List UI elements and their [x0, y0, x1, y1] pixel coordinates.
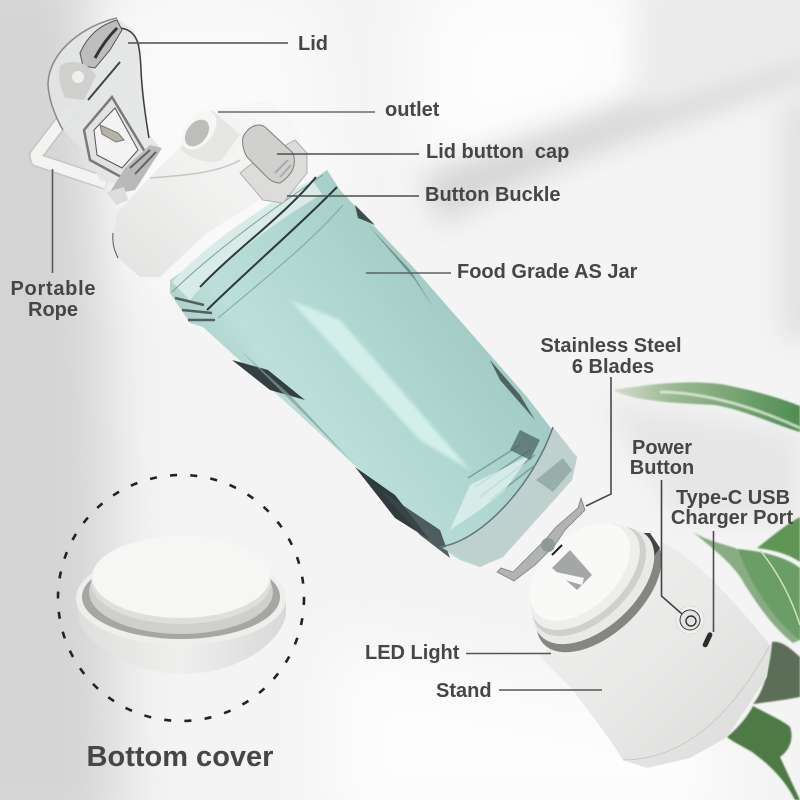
dark rim	[515, 509, 683, 675]
label: portable rope	[10, 169, 96, 321]
label: power button: Power	[632, 437, 692, 459]
inside rim	[172, 180, 322, 300]
base unit	[511, 504, 770, 768]
label: led light: LED Light	[365, 642, 460, 664]
label: power button	[630, 437, 694, 614]
stand	[540, 543, 770, 768]
label: type-c port: Charger Port	[671, 507, 793, 529]
bottom cover dashed circle	[58, 475, 304, 721]
bottom dark leaf	[727, 706, 800, 800]
label: type-c port	[671, 487, 793, 632]
label: stainless steel blades: 6 Blades	[572, 356, 654, 378]
bottom cover	[76, 536, 286, 674]
label: button buckle: Button Buckle	[425, 184, 561, 206]
seal disc	[59, 62, 96, 100]
portable rope	[36, 108, 106, 183]
label: power button: Button	[630, 457, 694, 479]
blade hub	[552, 550, 592, 590]
light centre band	[290, 300, 470, 470]
label: stainless steel blades	[540, 335, 682, 506]
main right leaf	[738, 549, 800, 640]
cup top cap	[113, 100, 307, 277]
latch	[80, 20, 122, 68]
label: stand: Stand	[436, 680, 492, 702]
plant leaves	[613, 382, 800, 800]
jar body	[170, 170, 577, 567]
label: outlet: outlet	[385, 99, 440, 121]
label: portable rope: Portable	[10, 278, 96, 300]
bottom ring	[442, 427, 577, 567]
lid	[48, 18, 162, 205]
collar rings	[513, 506, 675, 666]
facets	[355, 205, 375, 225]
label: bottom cover: Bottom cover	[87, 741, 273, 773]
hinge frame	[84, 97, 145, 178]
foam seal	[512, 505, 648, 639]
blade	[497, 498, 585, 581]
label: type-c port: Type-C USB	[676, 487, 790, 509]
top leaf	[613, 382, 800, 432]
button buckle	[240, 140, 307, 203]
jar	[170, 170, 577, 567]
inner threads	[468, 445, 535, 500]
label: lid button cap: Lid button cap	[426, 141, 569, 163]
dark upper leaf	[757, 517, 800, 562]
label: stainless steel blades: Stainless Steel	[540, 335, 682, 357]
grey-green leaf	[753, 642, 800, 704]
outlet	[180, 110, 240, 162]
light leaf	[693, 532, 800, 643]
power button	[676, 606, 704, 634]
threads	[172, 175, 323, 292]
charger port	[702, 631, 713, 648]
label: portable rope: Rope	[28, 299, 78, 321]
label: lid: Lid	[298, 33, 328, 55]
hinge strap	[88, 62, 120, 100]
label: food grade jar: Food Grade AS Jar	[457, 261, 638, 283]
lid button cap	[243, 125, 294, 183]
